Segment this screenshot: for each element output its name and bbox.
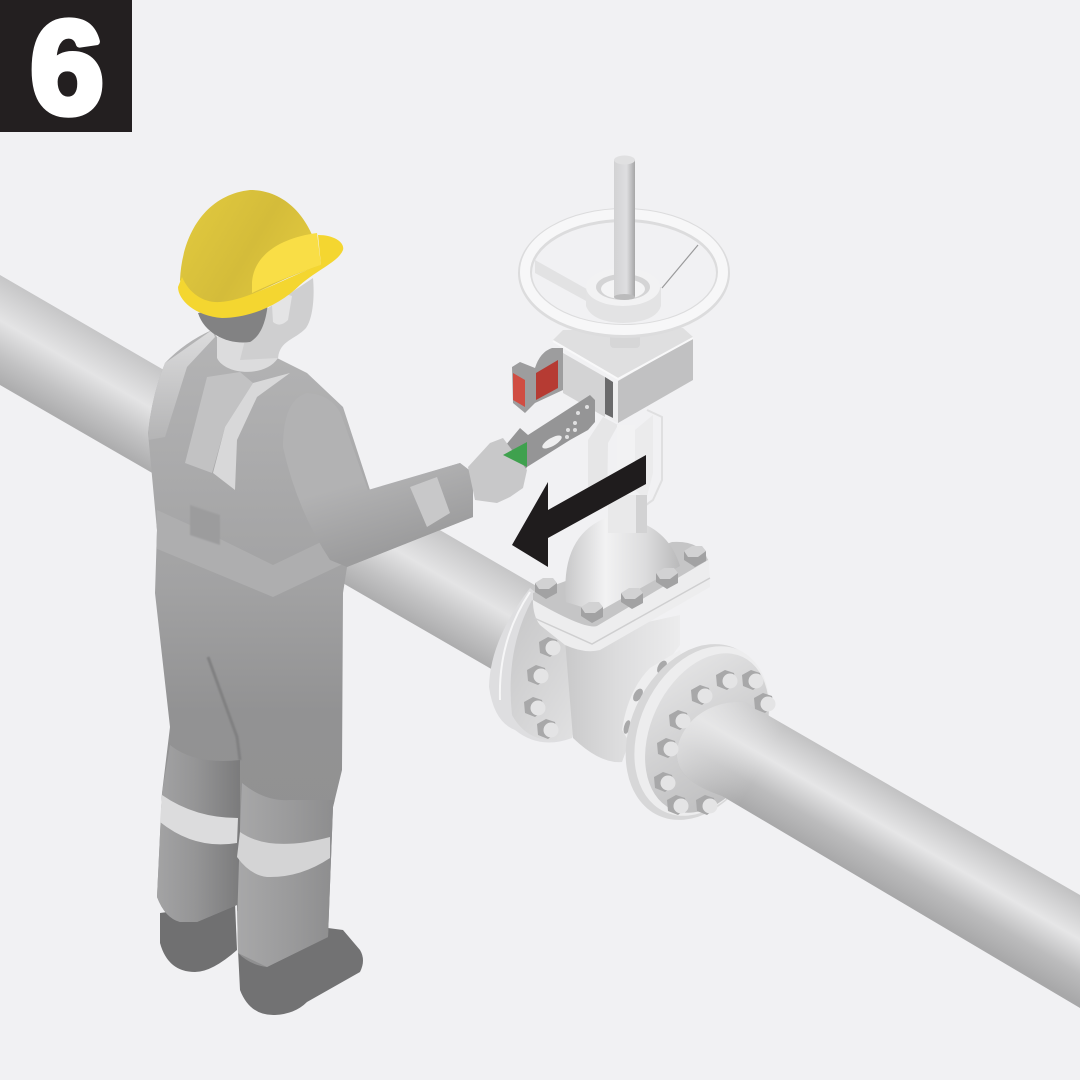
valve body	[565, 615, 680, 762]
leg stripes	[160, 795, 330, 877]
worker	[148, 190, 527, 1015]
pipe: left section	[0, 275, 545, 700]
boots	[160, 903, 363, 1015]
pipe: right section	[677, 702, 1080, 1008]
vest straps	[148, 330, 215, 440]
gearbox	[553, 328, 693, 423]
bonnet dome	[565, 517, 680, 612]
rear bolts	[622, 659, 669, 735]
yoke and stem	[588, 410, 662, 533]
green tag	[503, 442, 527, 467]
hair	[198, 303, 268, 343]
waist band	[156, 526, 341, 597]
left flange	[489, 588, 595, 742]
bonnet flange plate	[533, 542, 710, 651]
gap between legs	[208, 657, 240, 760]
head	[240, 278, 314, 360]
spindle	[614, 156, 635, 300]
number badge	[0, 0, 132, 141]
ear	[272, 295, 292, 325]
left shin	[150, 745, 240, 925]
right hub behind flange	[622, 650, 690, 760]
body silhouette	[148, 330, 473, 967]
direction arrow	[512, 455, 646, 567]
handwheel	[525, 214, 723, 331]
right shin	[236, 783, 338, 970]
gate valve	[489, 156, 796, 843]
suit shading and panels	[148, 330, 346, 970]
plate bolts	[535, 546, 706, 623]
flange bolts	[654, 670, 776, 815]
hub highlight	[677, 702, 790, 810]
helmet	[178, 190, 343, 318]
hand	[468, 438, 527, 503]
neck	[217, 330, 280, 372]
arm with sleeve	[283, 393, 473, 567]
lockout hasp: grey plate	[500, 395, 595, 480]
lever handle: red	[512, 348, 563, 413]
right flange	[598, 621, 796, 843]
